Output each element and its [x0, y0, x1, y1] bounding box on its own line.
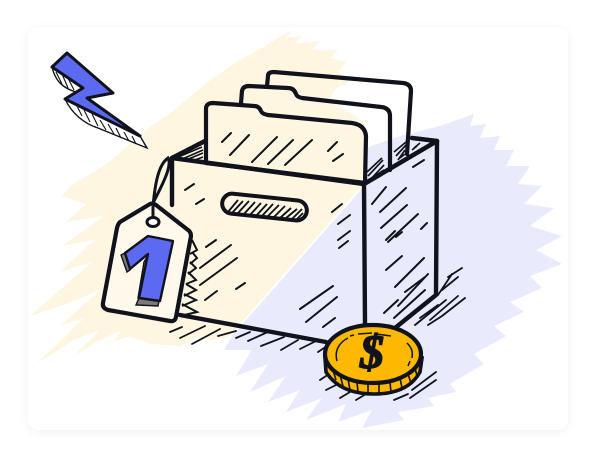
price tag	[103, 158, 197, 321]
lavender brush patch	[224, 114, 562, 428]
tag body	[103, 204, 191, 321]
tag shadow hatching	[180, 240, 197, 318]
number 1	[121, 236, 173, 306]
front file	[206, 103, 366, 183]
back file	[267, 72, 411, 154]
tag string	[153, 158, 169, 206]
box front and side outline	[172, 138, 437, 342]
middle file	[241, 86, 390, 170]
dollar sign: $	[359, 326, 384, 379]
icon: gold dollar coin	[325, 325, 422, 394]
cream brush patch	[30, 30, 367, 364]
ground hatching	[170, 268, 465, 400]
handle slot	[221, 193, 308, 221]
box surface sketch lines	[185, 160, 428, 327]
box	[170, 72, 465, 400]
box inner hatching	[176, 142, 420, 180]
tag hole	[147, 218, 159, 226]
panel: card background	[28, 27, 568, 432]
icon: lightning bolt	[52, 53, 147, 148]
